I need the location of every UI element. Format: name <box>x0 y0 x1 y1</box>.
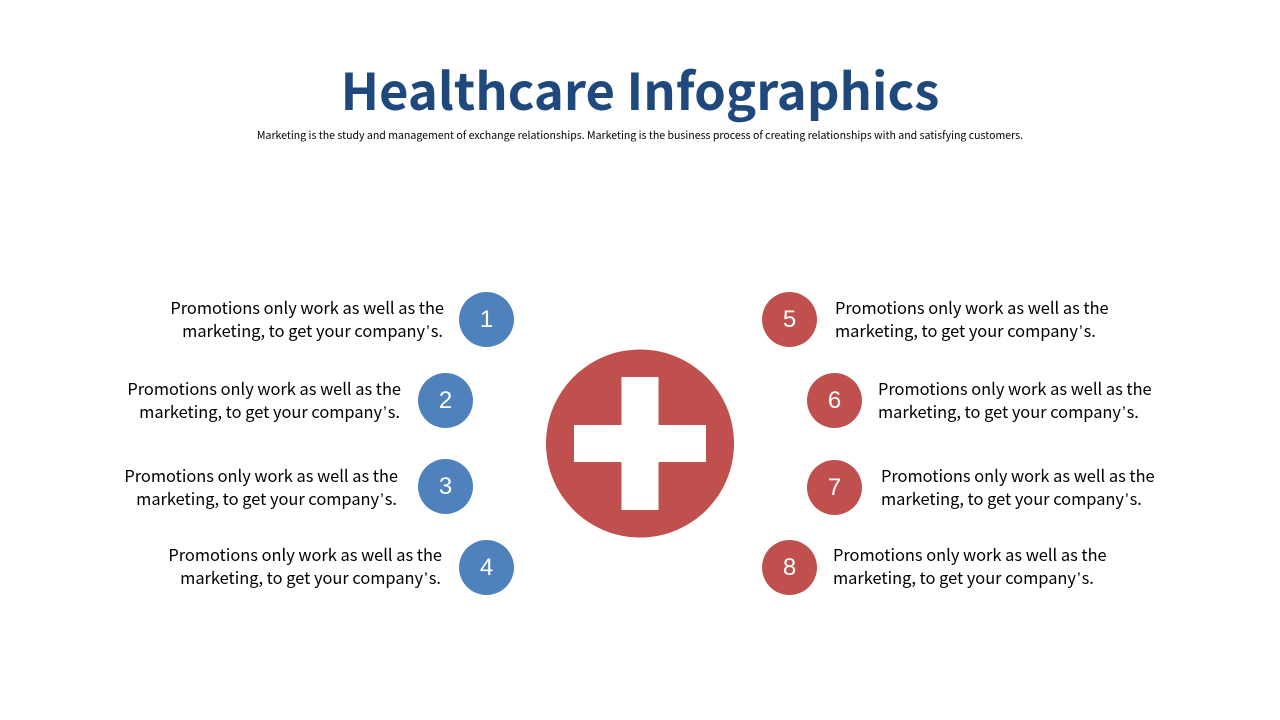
text: item 6: Promotions only work as well as the <box>878 376 1152 400</box>
text: item 2: marketing, to get your company’s. <box>139 399 400 423</box>
text: item 8: marketing, to get your company’s. <box>833 565 1094 589</box>
text: item 8: Promotions only work as well as the <box>833 542 1107 566</box>
text: item 6 <box>878 376 1152 423</box>
text: item 8 <box>833 542 1107 589</box>
text: item 2: Promotions only work as well as the <box>127 376 401 400</box>
badge: 4 <box>459 540 514 595</box>
text: item 5: marketing, to get your company’s. <box>835 318 1096 342</box>
badge: 1: 1 <box>480 306 493 333</box>
badge: 8 <box>762 540 817 595</box>
badge: 3: 3 <box>439 473 452 500</box>
badge: 7 <box>807 460 862 515</box>
badge: 4: 4 <box>480 554 493 581</box>
text: item 4: marketing, to get your company’s. <box>180 565 441 589</box>
title: Healthcare Infographics <box>341 51 939 125</box>
text: item 7: Promotions only work as well as the <box>881 463 1155 487</box>
badge: 2 <box>418 373 473 428</box>
text: item 5 <box>835 295 1109 342</box>
badge: 3 <box>418 459 473 514</box>
subtitle: Marketing is the study and management of exchange relationships. Marketing is the business process of creating relationships with and satisfying customers. <box>257 128 1023 143</box>
text: item 7 <box>881 463 1155 510</box>
badge: 6 <box>807 373 862 428</box>
text: item 1 <box>170 295 444 342</box>
text: item 4 <box>168 542 442 589</box>
text: item 2 <box>127 376 401 423</box>
badge: 8: 8 <box>783 554 796 581</box>
text: item 7: marketing, to get your company’s. <box>881 486 1142 510</box>
text: item 3: marketing, to get your company’s. <box>136 486 397 510</box>
badge: 5 <box>762 292 817 347</box>
text: item 1: Promotions only work as well as the <box>170 295 444 319</box>
badge: 1 <box>459 292 514 347</box>
badge: 7: 7 <box>828 474 841 501</box>
text: item 6: marketing, to get your company’s. <box>878 399 1139 423</box>
text: item 4: Promotions only work as well as the <box>168 542 442 566</box>
badge: 5: 5 <box>783 306 796 333</box>
badge: 6: 6 <box>828 387 841 414</box>
text: item 3: Promotions only work as well as the <box>124 463 398 487</box>
badge: 2: 2 <box>439 387 452 414</box>
text: item 1: marketing, to get your company’s. <box>182 318 443 342</box>
text: item 5: Promotions only work as well as the <box>835 295 1109 319</box>
text: item 3 <box>124 463 398 510</box>
icon: medical cross <box>546 350 734 538</box>
